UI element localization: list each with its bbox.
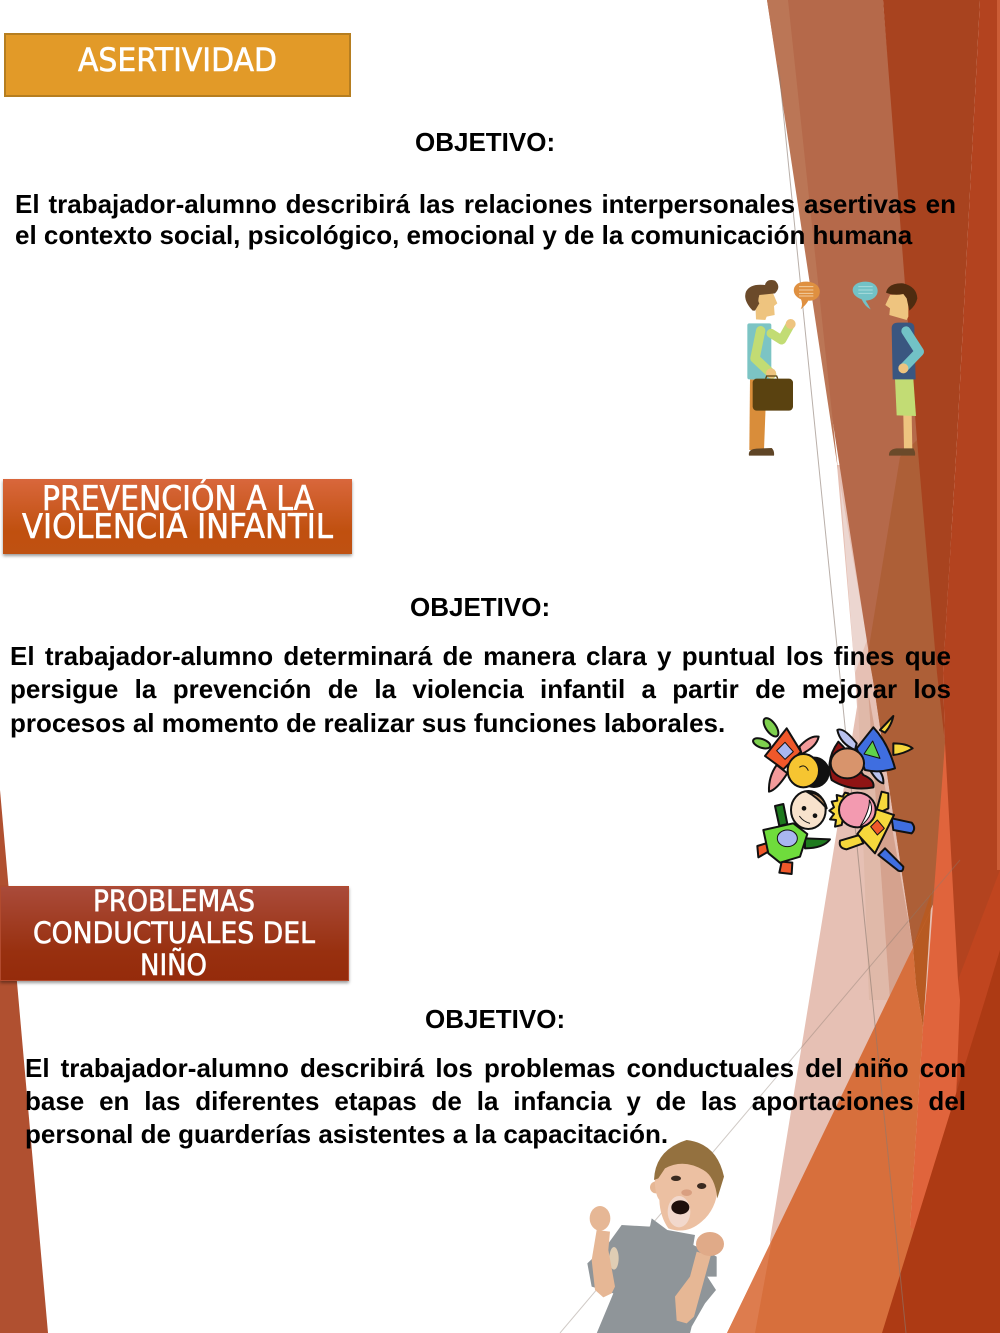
person with vest bbox=[885, 283, 919, 456]
text block: objetivo 2 bbox=[10, 641, 951, 738]
banner titles: CONDUCTUALES DEL bbox=[33, 916, 315, 950]
text block: objetivo 3: personal de guarderías asistentes a la capacitación. bbox=[25, 1119, 668, 1149]
child: bottom-left bbox=[757, 791, 830, 874]
text block: objetivo 3 bbox=[25, 1053, 966, 1149]
banner titles: ASERTIVIDAD bbox=[78, 41, 277, 79]
text block: objetivo 2: El trabajador-alumno determinará de manera clara y puntual los fines que bbox=[10, 641, 951, 671]
banner titles: PROBLEMAS bbox=[93, 884, 255, 918]
speech bubble: teal bbox=[853, 282, 878, 309]
child: top-left bbox=[752, 716, 829, 792]
shirt bbox=[587, 1218, 717, 1333]
banner: ASERTIVIDAD bbox=[4, 33, 351, 97]
head bbox=[650, 1140, 724, 1231]
banner: PROBLEMAS bbox=[0, 886, 349, 981]
left arm bbox=[590, 1206, 615, 1297]
banner: PREVENCIÓN bbox=[3, 479, 352, 554]
child: top-right bbox=[829, 716, 913, 789]
heading: objetivo 3: OBJETIVO: bbox=[425, 1004, 565, 1034]
banner titles: PREVENCIÓN A LA bbox=[42, 478, 314, 519]
speech bubble: orange bbox=[794, 282, 820, 309]
text block: objetivo 1 bbox=[15, 189, 956, 250]
child: bottom-right bbox=[829, 792, 914, 871]
banner titles: NIÑO bbox=[140, 948, 207, 982]
person with briefcase bbox=[745, 280, 796, 456]
text block: objetivo 3: base en las diferentes etapas de la infancia y de las aportaciones del bbox=[25, 1086, 966, 1116]
text block: objetivo 3: El trabajador-alumno describirá los problemas conductuales del niño con bbox=[25, 1053, 966, 1083]
text block: objetivo 1: El trabajador-alumno describirá las relaciones interpersonales asertivas en bbox=[15, 189, 956, 219]
text block: objetivo 2: persigue la prevención de la violencia infantil a partir de mejorar los bbox=[10, 674, 951, 704]
banner titles: VIOLENCIA INFANTIL bbox=[22, 507, 333, 547]
text block: objetivo 2: procesos al momento de realizar sus funciones laborales. bbox=[10, 708, 725, 738]
text block: objetivo 1: el contexto social, psicológico, emocional y de la comunicación humana bbox=[15, 220, 912, 250]
right arm bbox=[675, 1232, 724, 1323]
heading: objetivo 2: OBJETIVO: bbox=[410, 592, 550, 622]
heading: objetivo 1: OBJETIVO: bbox=[415, 127, 555, 157]
